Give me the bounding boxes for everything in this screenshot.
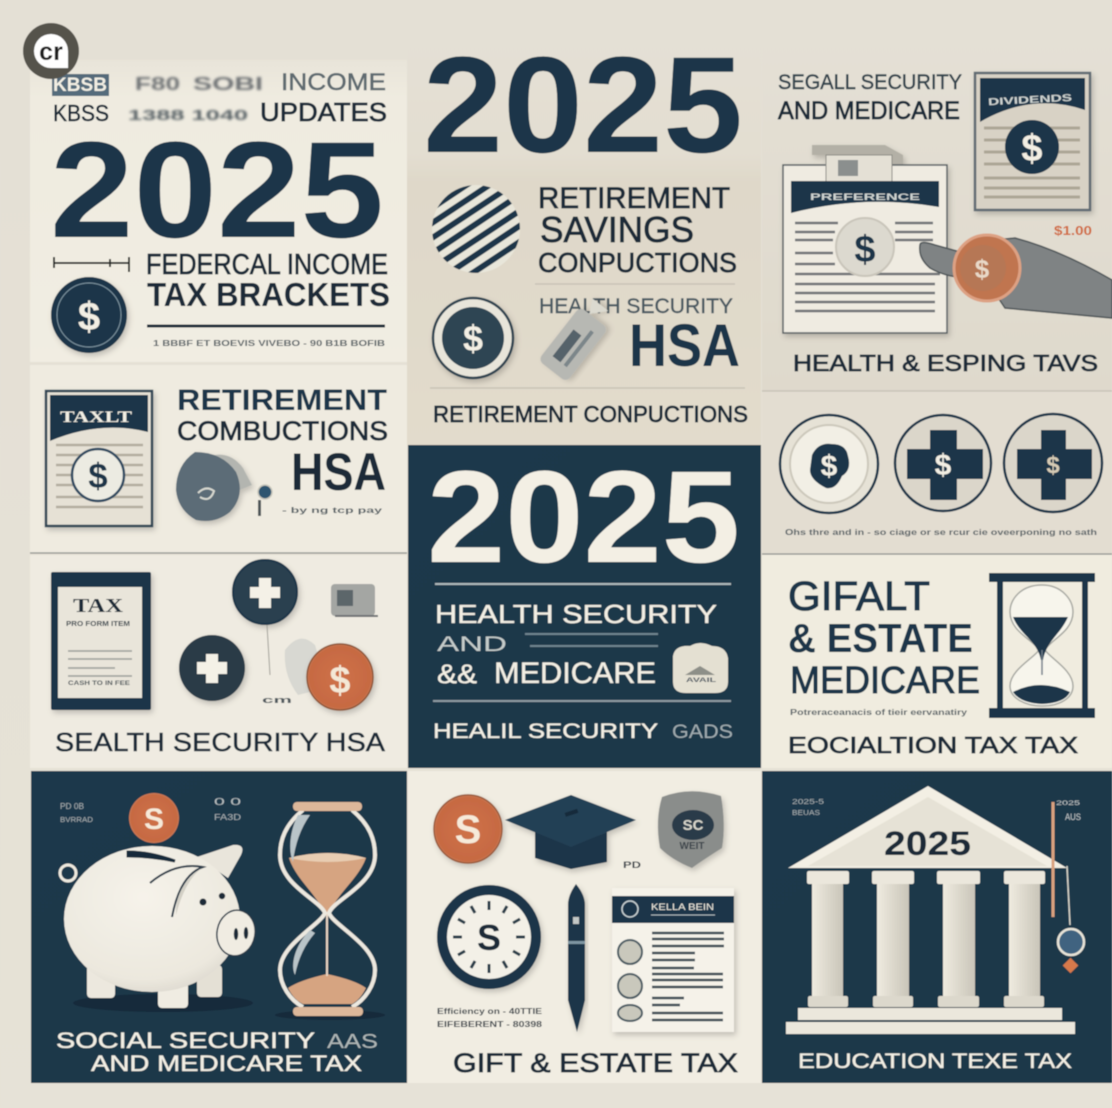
icon: stamp (673, 643, 728, 693)
fine print right: FA3D (214, 813, 241, 822)
icon: small key (258, 485, 272, 516)
heading: HSA: HSA (291, 443, 386, 502)
fine print left: BEUAS (792, 810, 820, 817)
caption: social security and medicare tax: SOCIAL SECURITY (56, 1028, 315, 1053)
bracket icon (54, 257, 129, 272)
caption: health security HSA: SEALTH SECURITY HSA (55, 727, 386, 757)
fine print left: BVRRAD (60, 817, 93, 824)
heading: gift and estate medicare (788, 573, 980, 702)
icon: orange dollar coin (307, 644, 373, 710)
heading: federal income tax brackets (146, 249, 390, 313)
divider (147, 324, 385, 328)
garbled heading line one: INCOME (281, 69, 386, 96)
icon: plus button (233, 560, 297, 624)
fine print under clock (437, 1007, 543, 1029)
caption: education tax: EOCIALTION TAX TAX (788, 732, 1078, 758)
icon: sand hourglass (275, 802, 385, 1020)
garbled heading line two: UPDATES (260, 97, 387, 127)
caption: social security and medicare tax: AND MEDICARE TAX (91, 1051, 362, 1076)
icon: gray shield badge (658, 791, 724, 868)
heading: health security: HEALTH SECURITY (435, 599, 717, 629)
icon: tax document: TAXLT (60, 409, 132, 426)
panel: retirement contributions HSA (30, 365, 407, 553)
orange amount label: $1.00 (1054, 223, 1092, 238)
fine print under clock: EIFEBERENT - 80398 (437, 1020, 543, 1029)
icon: clipboard tax form: PREFERENCE (810, 192, 920, 202)
panel: social security and medicare documents (762, 40, 1112, 391)
panel: navy 2025 health security and medicare (408, 443, 761, 768)
icon: medical cross coin (1004, 414, 1102, 512)
icon: small device (331, 584, 378, 616)
faint tether and cloud: cm (262, 695, 292, 705)
fine print left (60, 802, 93, 824)
faint tether and cloud (262, 625, 319, 705)
icon: graduation cap (505, 795, 636, 869)
icon: stamp: AVAIL (686, 678, 717, 684)
fine print left: 2025-5 (792, 799, 824, 806)
heading: federal income tax brackets: FEDERCAL INCOME (146, 249, 388, 281)
icon: temple with 2025 (786, 786, 1075, 1034)
fine print right: 0 0 (214, 797, 242, 808)
icon: document with list (612, 888, 734, 1032)
heading: gift and estate medicare: GIFALT (788, 573, 930, 619)
icon: piggy bank (60, 845, 259, 1012)
heading: retirement contributions (177, 384, 388, 446)
big year 2025: 2025 (427, 443, 740, 590)
caption: education tax: EDUCATION TEXE TAX (798, 1050, 1072, 1073)
fine print right: AUS (1065, 812, 1081, 822)
fine print right (1056, 801, 1081, 822)
caption: social security and medicare tax (56, 1028, 378, 1076)
icon: copper coin (954, 235, 1020, 301)
caption: health and estate tax: HEALTH & ESPING TAVS (793, 350, 1098, 376)
panel: gift and estate medicare (762, 555, 1112, 768)
heading: and medicare: && (437, 659, 477, 689)
icon: striped ball (432, 184, 520, 274)
panel: central top 2025 retirement savings (407, 29, 761, 445)
fine print: Ohs thre and in - so ciage or se rcur cie oveerponing no sath (785, 528, 1097, 537)
icon: dollar circle: $ (821, 450, 838, 483)
icon: padlock (176, 452, 252, 521)
caption: health security: HEALIL SECURITY (433, 720, 658, 743)
icon: tax tablet (51, 572, 151, 710)
icon: medical cross coin: $ (1046, 452, 1060, 479)
icon: orange coin: S (144, 803, 164, 836)
heading: gift and estate medicare: MEDICARE (790, 660, 980, 702)
fine print: Potreraceanacis of tieir eervanatiry (790, 708, 968, 717)
fine print right: 2025 (1056, 801, 1081, 807)
subheading: health security: HEALTH SECURITY (539, 295, 733, 318)
garbled heading line two: 1388 1040 (128, 107, 248, 124)
2025 on pediment: 2025 (884, 825, 971, 863)
heading: social security and medicare: SEGALL SECURITY (778, 71, 962, 94)
icon: tax tablet: CASH TO IN FEE (68, 681, 130, 687)
fine print left: PD 0B (60, 802, 84, 811)
icon: dollar button (433, 298, 513, 378)
caption: gift and estate tax: GIFT & ESTATE TAX (453, 1048, 738, 1078)
big year 2025: 2025 (50, 114, 384, 267)
heading: and medicare: MEDICARE (494, 657, 656, 690)
heading: HSA: HSA (629, 312, 740, 379)
caption: health security: GADS (672, 722, 733, 743)
fine print: 1 BBBF ET BOEVIS VIVEBO - 90 B1B BOFIB (153, 339, 385, 348)
fine print under clock: Efficiency on - 40TTIE (437, 1007, 543, 1016)
heading: retirement contributions: RETIREMENT (177, 384, 387, 417)
icon: plus button two (179, 635, 245, 701)
icon: clipboard tax form: $ (854, 229, 876, 271)
tiny label: PD (623, 860, 642, 870)
icon: clipboard tax form (783, 145, 947, 333)
icon: small tax document: $ (1021, 128, 1043, 170)
heading: social security and medicare (778, 71, 962, 125)
icon: gray pointer hand (920, 238, 1112, 318)
icon: tax document: $ (88, 457, 108, 496)
heading: social security and medicare: AND MEDICARE (778, 97, 960, 125)
icon: clock with dollar: S (477, 917, 501, 958)
big year 2025: 2025 (423, 29, 743, 182)
watermark badge: cr (39, 38, 63, 66)
panel: federal income tax brackets (30, 60, 407, 362)
watermark badge (23, 23, 79, 79)
icon: small tax document (975, 73, 1090, 210)
garbled heading line one: F80 (135, 74, 180, 94)
heading: retirement savings contributions (538, 182, 737, 278)
icon: tax tablet: TAX (73, 595, 124, 617)
icon: money roll (538, 295, 617, 382)
fine print: - by ng tcp pay (282, 506, 383, 515)
icon: dollar circle (780, 415, 878, 513)
icon: dollar coin: $ (78, 295, 100, 339)
fine print left (792, 799, 824, 817)
heading: gift and estate medicare: & ESTATE (788, 615, 973, 661)
icon: gray shield badge: WEIT (680, 841, 704, 852)
heading: retirement savings contributions: CONPUCTIONS (538, 247, 737, 278)
caption: health security (433, 720, 733, 743)
garbled heading line one: KBSB (53, 75, 107, 96)
panel: education tax temple (762, 771, 1112, 1083)
icon: orange coin (129, 793, 179, 843)
heading: retirement contributions: COMBUCTIONS (177, 416, 388, 446)
panel: health security HSA (30, 555, 407, 768)
garbled heading line two (53, 97, 387, 127)
icon: hanging tassel pendant (1053, 802, 1084, 973)
panel: gift and estate tax (408, 771, 761, 1083)
panel: medical icons (762, 392, 1112, 554)
panel: piggy bank (31, 771, 407, 1083)
icon: medical cross dollar: $ (935, 449, 952, 482)
icon: orange coin: S (455, 808, 481, 852)
caption: retirement contributions: RETIREMENT CONPUCTIONS (433, 401, 748, 427)
icon: orange coin (434, 795, 502, 863)
icon: medical cross dollar (895, 415, 991, 511)
icon: small tax document: DIVIDENDS (988, 93, 1073, 108)
garbled heading line one (52, 69, 386, 96)
garbled heading line one: SOBI (193, 74, 263, 94)
icon: tax document (46, 391, 152, 526)
icon: clock with dollar (442, 890, 536, 984)
fine print right (214, 797, 242, 822)
heading: retirement savings contributions: SAVINGS (540, 209, 694, 250)
icon: dollar button: $ (463, 318, 483, 359)
caption: social security and medicare tax: AAS (327, 1031, 378, 1053)
heading: federal income tax brackets: TAX BRACKETS (147, 276, 390, 313)
icon: copper coin: $ (975, 254, 990, 284)
icon: tax tablet: PRO FORM ITEM (66, 621, 130, 628)
icon: dollar coin (51, 277, 127, 353)
icon: pen (568, 884, 585, 1032)
garbled heading line two: KBSS (53, 100, 109, 126)
heading: and: AND (437, 633, 507, 656)
icon: gray shield badge: SC (683, 817, 704, 834)
icon: orange dollar coin: $ (329, 660, 351, 702)
icon: framed hourglass (989, 573, 1095, 718)
icon: document with list: KELLA BEIN (651, 902, 714, 912)
heading: retirement savings contributions: RETIREMENT (538, 182, 730, 215)
